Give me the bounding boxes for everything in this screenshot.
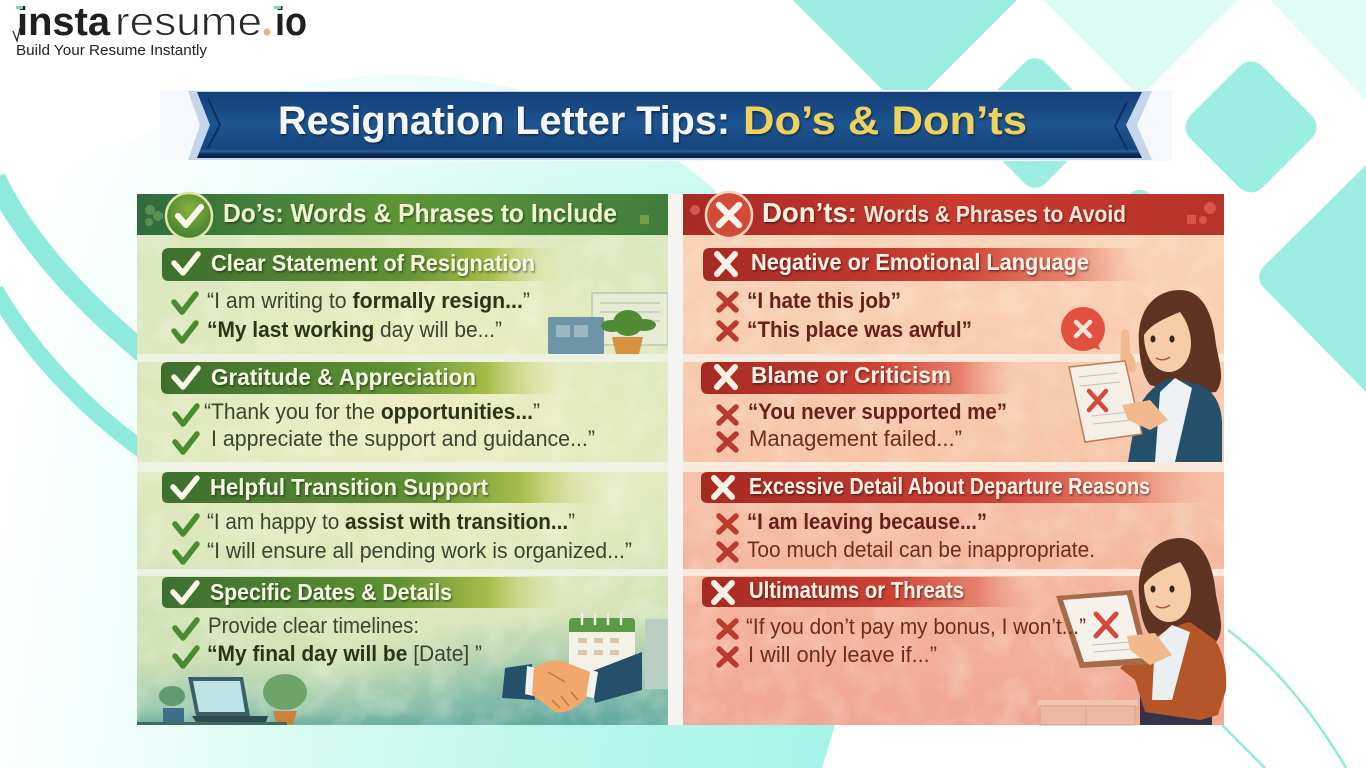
logo wordmark [13,0,307,44]
section: clear statement: “My last working day will be...” [207,317,502,342]
illustration: calendar [569,614,668,690]
logo wordmark: insta [17,0,111,44]
don'ts heading [762,197,1126,228]
section: dates: Provide clear timelines: [208,613,419,638]
don'ts header ornaments [690,202,1216,224]
section: transition [162,472,632,563]
section: gratitude: I appreciate the support and guidance...” [211,426,595,451]
section: dates: “My final day will be [Date] ” [207,641,482,666]
section: negative language: “This place was awful” [747,317,972,342]
section: excessive detail: Excessive Detail About Departure Reasons [749,473,1150,499]
panel: don'ts [683,192,1226,725]
section: gratitude: “Thank you for the opportunities...” [204,399,540,424]
don'ts header badge [706,192,752,238]
panel divider [668,194,683,725]
banner heading [278,99,1027,143]
illustration: desk with monitor and plant [548,293,668,354]
section gaps [683,354,1224,576]
illustration: speech bubble [1061,307,1105,351]
section: clear statement: Clear Statement of Resignation [211,250,535,276]
section: ultimatums: I will only leave if...” [748,642,937,667]
illustration: woman with navy jacket [1069,290,1222,462]
section: transition: Helpful Transition Support [210,474,488,500]
section: blame: Management failed...” [749,426,962,451]
illustration: laptop and plants [137,674,307,725]
section: gratitude: Gratitude & Appreciation [211,364,476,390]
section: clear statement: “I am writing to formally resign...” [207,288,530,313]
section: negative language [703,248,1150,342]
section: blame: “You never supported me” [748,399,1007,424]
illustration: desk [1038,700,1138,725]
don'ts heading: Words & Phrases to Avoid [864,201,1126,227]
section: negative language: Negative or Emotional Language [751,249,1089,275]
section: ultimatums: “If you don’t pay my bonus, I won’t...” [746,614,1086,639]
panel: do's [137,193,668,725]
banner heading: Resignation Letter Tips: [278,99,730,143]
section: dates: Specific Dates & Details [210,579,452,605]
illustration: woman with orange jacket [1056,538,1226,725]
logo wordmark: resume [115,0,262,44]
logo tagline: Build Your Resume Instantly [16,42,207,59]
banner heading: Do’s & Don’ts [743,99,1027,143]
section: excessive detail: “I am leaving because...” [747,509,987,534]
section: transition: “I am happy to assist with transition...” [207,509,575,534]
section: excessive detail [701,472,1224,562]
do's heading: Do’s: Words & Phrases to Include [223,198,617,228]
section: gratitude [161,362,595,452]
do's header badge [166,193,212,239]
logo [13,0,307,59]
section: blame: Blame or Criticism [751,362,951,388]
don'ts header bar [683,194,1224,235]
section: excessive detail: Too much detail can be inappropriate. [747,537,1095,562]
do's header bar [137,194,668,235]
section: clear statement [162,248,562,342]
section: blame [701,362,1020,451]
section: transition: “I will ensure all pending work is organized...” [207,538,632,563]
section gaps [137,354,668,576]
logo wordmark: io [275,0,307,44]
don'ts heading: Don’ts: [762,197,857,228]
title banner [160,90,1172,161]
section: dates [162,577,560,666]
section: ultimatums: Ultimatums or Threats [749,577,964,603]
illustration: handshake [502,652,642,712]
section: negative language: “I hate this job” [747,288,901,313]
do's header ornaments [145,205,649,226]
section: ultimatums [702,577,1086,667]
